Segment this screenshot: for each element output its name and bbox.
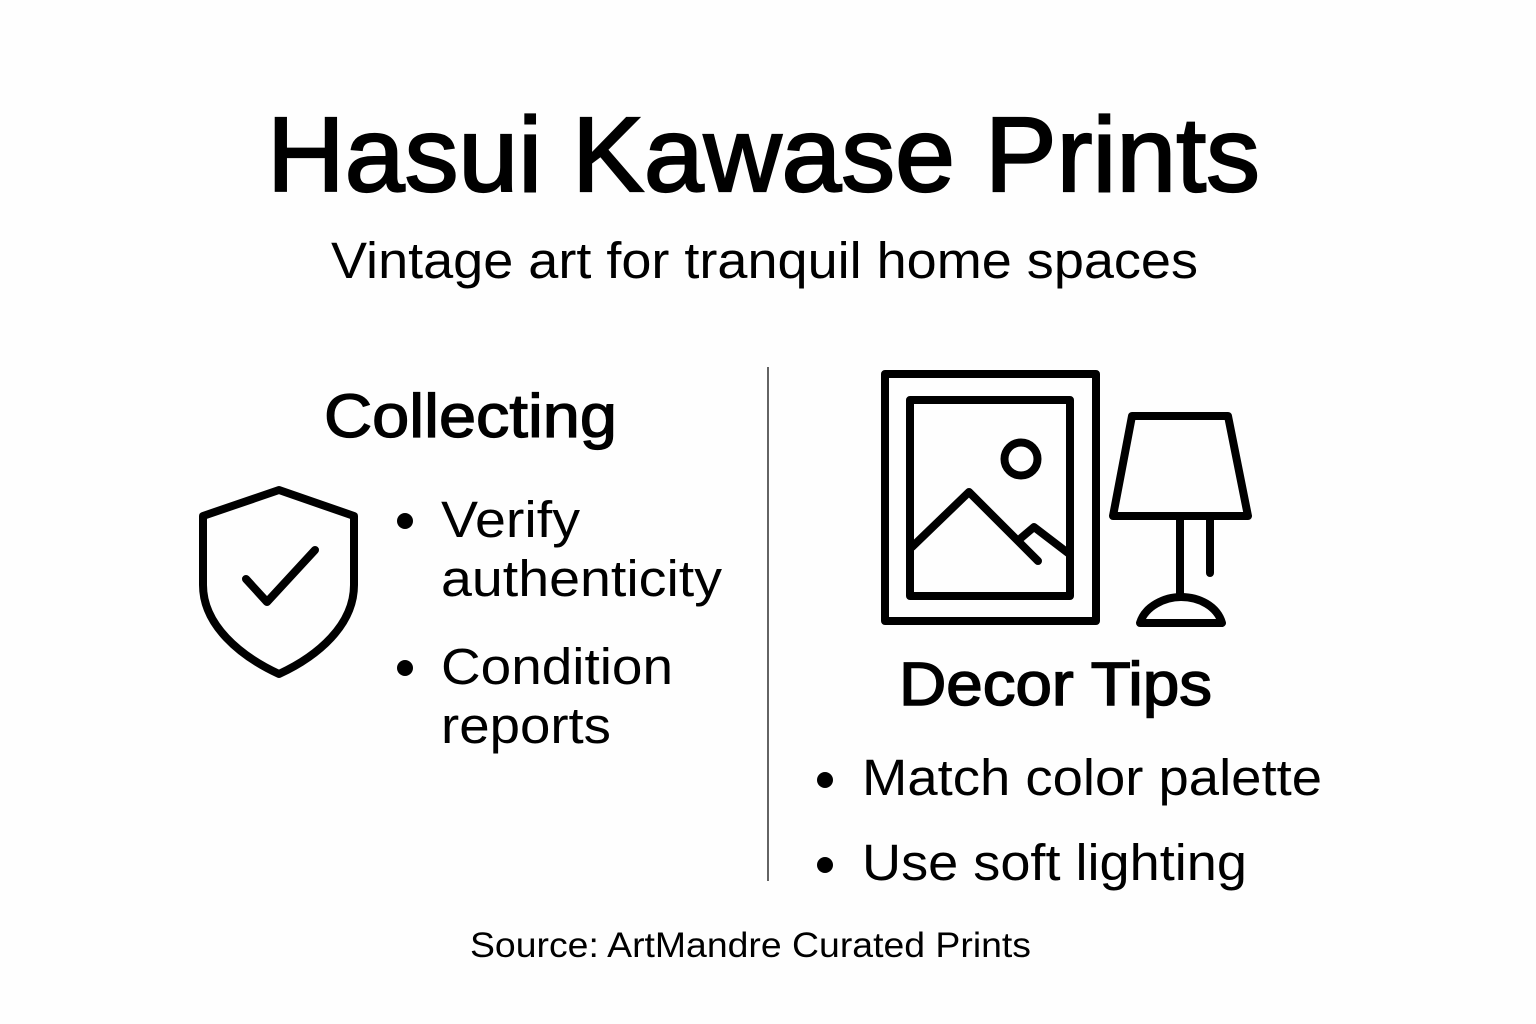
bullet list: collecting: Condition (441, 638, 673, 695)
heading: collecting: Collecting (324, 382, 617, 450)
bullet list: collecting: Verify (441, 491, 581, 548)
icon: framed landscape picture (885, 374, 1096, 621)
bullet list: decor tips: Match color palette (862, 749, 1322, 806)
bullet list: collecting: reports (441, 697, 611, 754)
subtitle: Vintage art for tranquil home spaces (331, 232, 1198, 289)
bullet list: collecting (397, 491, 723, 754)
icon: shield with check (203, 490, 354, 674)
source note: Source: ArtMandre Curated Prints (470, 926, 1031, 965)
panel: collecting (203, 382, 723, 754)
panel: decor tips (817, 374, 1322, 891)
bullet list: decor tips: Use soft lighting (862, 834, 1247, 891)
heading: decor tips: Decor Tips (899, 650, 1212, 718)
title: Hasui Kawase Prints (267, 96, 1260, 214)
icon: table lamp (1113, 416, 1248, 623)
bullet list: collecting: authenticity (441, 550, 723, 607)
bullet list: decor tips (817, 749, 1322, 891)
